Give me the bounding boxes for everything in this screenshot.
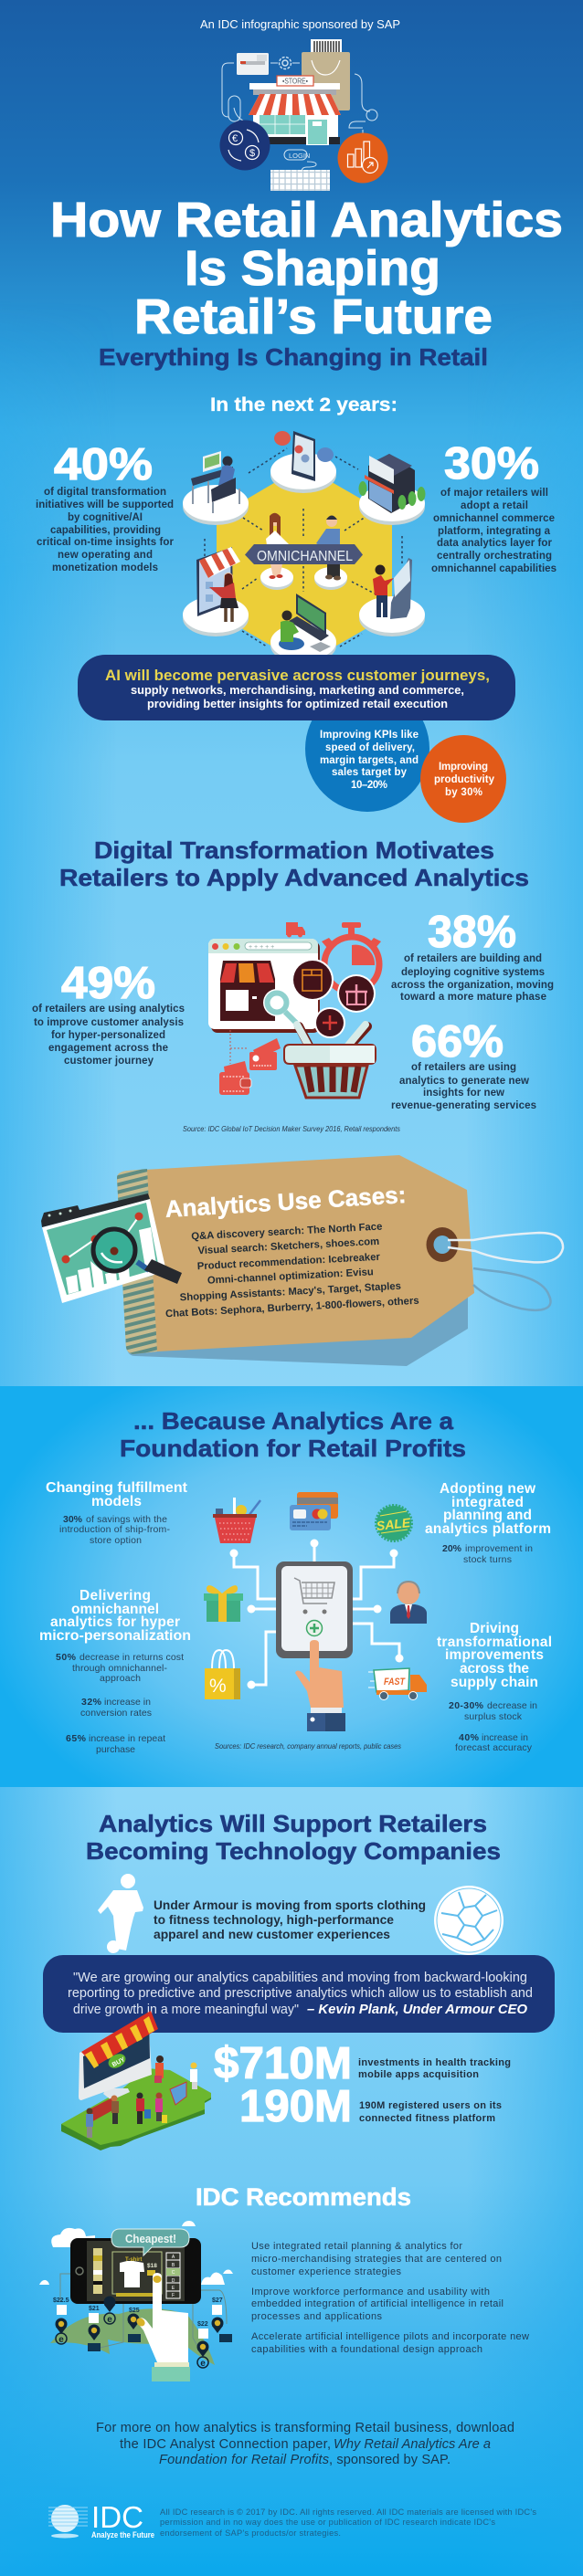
location pins and prices: $27 [212, 2297, 223, 2304]
stat: 49 percent: for hyper-personalized [51, 1030, 165, 1041]
icon: connector lines [222, 63, 377, 172]
stat: 40 percent: monetization models [52, 563, 158, 573]
stat: 40 percent: critical on-time insights for [37, 537, 175, 548]
icon: payment cards [290, 1492, 338, 1530]
phone [70, 2238, 201, 2304]
stat: 40 percent: 40% [54, 440, 153, 489]
icon: credit card [237, 53, 269, 75]
block: integrated platform: improvement in [465, 1543, 533, 1554]
icon: storefront: •STORE• [282, 77, 308, 86]
callout: CEO quote [43, 1955, 555, 2033]
heading: IDC Recommends: IDC Recommends [196, 2183, 411, 2211]
icon: sale badge: SALE [376, 1515, 412, 1533]
hero illustration: store [219, 39, 387, 191]
omnichannel banner [245, 544, 363, 564]
stat: 49 percent: to improve customer analysis [34, 1017, 184, 1028]
phone: F [172, 2293, 175, 2298]
tag eyelet [426, 1227, 459, 1262]
section heading: because analytics: ... Because Analytics Are a [133, 1407, 454, 1435]
tablet [276, 1561, 353, 1658]
block: changing fulfillment: models [91, 1494, 142, 1509]
block: omnichannel analytics: Delivering [80, 1588, 151, 1603]
stat: 30 percent: omnichannel commerce [433, 513, 555, 524]
circle: KPI improvement: 10–20% [351, 780, 387, 791]
stat: 38 percent: of retailers are building and [404, 953, 542, 964]
icon: discount bag: % [209, 1676, 227, 1697]
stat: 710M: $710M [214, 2039, 352, 2088]
stat: 49 percent [32, 959, 185, 1067]
icon: delivery truck [286, 922, 305, 937]
icon: soccer ball [434, 1886, 504, 1955]
stat: 710M: mobile apps acquisition [358, 2069, 479, 2080]
callout: AI pervasive: supply networks, merchandising, marketing and commerce, [131, 683, 464, 697]
subheading: next 2 years: In the next 2 years: [210, 394, 398, 415]
tag list: Visual search: Sketchers, shoes.com [197, 1236, 379, 1256]
stat: 40 percent: by cognitive/AI [68, 512, 143, 523]
block: integrated platform: planning and [443, 1508, 532, 1523]
recommendations list: embedded integration of artificial intelligence in retail [251, 2298, 504, 2309]
phone price-comparison illustration [39, 2221, 233, 2381]
man figure [316, 515, 341, 581]
call to action: Foundation for Retail Profits [159, 2453, 329, 2467]
phone: T-shirt [125, 2257, 142, 2263]
location pins and prices: e [58, 2335, 64, 2345]
stat: 66 percent [391, 1017, 536, 1111]
stat: 190M: 190M [239, 2082, 352, 2131]
icon: basket [213, 1498, 260, 1543]
recommendations list: capabilities with a foundational design approach [251, 2344, 482, 2355]
block: omnichannel analytics: 65% [66, 1733, 87, 1744]
monitor: BUY [111, 2056, 126, 2068]
icon: browser window with store: + + + + + [249, 944, 274, 951]
block: omnichannel analytics: decrease in returns cost [80, 1652, 184, 1663]
block: supply chain: forecast accuracy [455, 1742, 533, 1753]
text: Under Armour: to fitness technology, high-performance [154, 1913, 394, 1927]
stat: 710M: investments in health tracking [358, 2057, 511, 2068]
icon: currency exchange circle [219, 121, 270, 170]
icon: stopwatch [322, 922, 381, 992]
circle: productivity: by 30% [445, 787, 482, 798]
phone: B [172, 2263, 175, 2268]
connector dots [230, 1540, 404, 1689]
block: omnichannel analytics: micro-personalization [39, 1628, 191, 1644]
phone: D [172, 2278, 175, 2284]
block: omnichannel analytics: 50% [56, 1652, 77, 1663]
stat: 30 percent: of major retailers will [440, 488, 548, 499]
icon: storefront [249, 76, 341, 145]
stat: 40 percent: initiatives will be supported [36, 499, 174, 510]
subtitle: Everything Is Changing in Retail [99, 343, 488, 371]
dashed links [205, 448, 402, 647]
IDC logo: Analyze the Future [91, 2530, 154, 2540]
block: omnichannel analytics: analytics for hyper [50, 1614, 180, 1630]
tag list: Chat Bots: Sephora, Burberry, 1-800-flowers, others [165, 1296, 419, 1320]
thin wires [60, 2274, 227, 2356]
phone: E [172, 2286, 175, 2291]
location pins and prices: $22 [197, 2321, 208, 2328]
section heading: because analytics: Foundation for Retail Profits [120, 1435, 466, 1462]
legal text: endorsement of SAP's products/or strategies. [160, 2529, 341, 2538]
block: supply chain [437, 1621, 552, 1753]
block: omnichannel analytics: 32% [81, 1697, 102, 1708]
icon: currency exchange circle: $ [249, 148, 255, 159]
stat: 38 percent [391, 908, 554, 1003]
stat: 38 percent: across the organization, moving [391, 980, 554, 991]
call to action: , sponsored by SAP. [329, 2453, 450, 2467]
map [50, 2308, 215, 2365]
block: supply chain: Driving [470, 1621, 519, 1636]
woman figure [266, 513, 290, 579]
login pill label: LOGIN [289, 152, 310, 160]
cheapest speech bubble: Cheapest! [125, 2232, 176, 2245]
circle: KPI improvement: margin targets, and [320, 755, 419, 766]
stat: 30 percent: adopt a retail [461, 500, 528, 511]
platform [61, 2093, 211, 2150]
callout: CEO quote: – Kevin Plank, Under Armour CEO [307, 2003, 527, 2017]
IDC logo: IDC [91, 2500, 143, 2534]
icon: growth chart circle [338, 133, 387, 183]
callout: AI pervasive [78, 655, 515, 720]
icon: shopping basket [284, 1025, 376, 1098]
section heading: technology companies: Becoming Technology Companies [86, 1837, 501, 1865]
tag body [117, 1155, 474, 1354]
recommendations list: Accelerate artificial intelligence pilots and incorporate new [251, 2331, 529, 2342]
icon: person at desk [191, 451, 239, 513]
callout: CEO quote: drive growth in a more meaningful way" [73, 2003, 299, 2017]
section heading: because analytics [120, 1407, 466, 1462]
location pins and prices: $22.5 [53, 2297, 69, 2304]
tag list: Q&A discovery search: The North Face [191, 1222, 383, 1242]
block: omnichannel analytics: increase in repeat [89, 1733, 165, 1744]
block: changing fulfillment: 30% [63, 1514, 83, 1525]
stat: 710M [214, 2039, 511, 2088]
callout: CEO quote: reporting to predictive and prescriptive analytics which allow us to establish and [68, 1986, 533, 2001]
circle: KPI improvement: sales target by [332, 767, 408, 778]
section heading: digital transformation [59, 836, 529, 891]
block: omnichannel analytics: omnichannel [71, 1602, 159, 1617]
clouds [39, 2221, 233, 2285]
block: supply chain: supply chain [450, 1675, 538, 1690]
block: supply chain: transformational [437, 1635, 552, 1650]
icon: sale badge [376, 1506, 412, 1540]
icon: fast truck [368, 1668, 427, 1700]
icon: keyboard [270, 170, 330, 191]
recommendations list: processes and applications [251, 2311, 382, 2322]
stat: 30 percent [431, 439, 556, 574]
section heading: technology companies: Analytics Will Support Retailers [99, 1810, 487, 1837]
legal text [160, 2508, 536, 2538]
circle: KPI improvement: Improving KPIs like [320, 730, 419, 741]
callout: AI pervasive: providing better insights for optimized retail execution [147, 697, 448, 710]
cheapest speech bubble [111, 2229, 189, 2255]
text: Under Armour [154, 1898, 426, 1941]
stat: 30 percent: 30% [444, 439, 539, 489]
icon: shopping bag with barcode [302, 39, 350, 110]
block: changing fulfillment: introduction of ship-from- [59, 1524, 170, 1535]
stat: 190M [239, 2082, 502, 2131]
icon: product bubbles [292, 959, 376, 1038]
callout: CEO quote: "We are growing our analytics capabilities and moving from backward-looking [73, 1971, 527, 1985]
icon: soccer player [98, 1874, 143, 1953]
title [50, 193, 563, 344]
section heading: digital transformation: Retailers to Apply Advanced Analytics [59, 864, 529, 891]
block: integrated platform: Adopting new [440, 1481, 536, 1497]
block: integrated platform: integrated [451, 1495, 524, 1510]
recommendations list: Use integrated retail planning & analytics for [251, 2241, 462, 2252]
block: changing fulfillment [46, 1480, 187, 1546]
section heading: digital transformation: Digital Transformation Motivates [94, 836, 494, 864]
block: integrated platform [425, 1481, 551, 1565]
block: changing fulfillment: store option [90, 1535, 142, 1546]
block: supply chain: 20-30% [449, 1700, 484, 1711]
omnichannel hexagon diagram [183, 431, 426, 665]
block: changing fulfillment: Changing fulfillment [46, 1480, 187, 1496]
title: Retail’s Future [134, 289, 493, 344]
stat: 49 percent: 49% [61, 959, 155, 1008]
stat: 40 percent: of digital transformation [44, 487, 166, 498]
source note: Source: IDC Global IoT Decision Maker Survey 2016, Retail respondents [183, 1124, 401, 1133]
logo sphere [48, 2505, 88, 2539]
icon: discount bag [205, 1650, 240, 1699]
text: Under Armour: Under Armour is moving from sports clothing [154, 1898, 426, 1912]
location pins and prices: e [107, 2315, 112, 2325]
stat: 38 percent: deploying cognitive systems [401, 967, 545, 978]
title: Is Shaping [185, 241, 440, 296]
stat: 66 percent: revenue-generating services [391, 1100, 536, 1111]
block: omnichannel analytics: increase in [104, 1697, 151, 1708]
call to action: Why Retail Analytics Are a [334, 2437, 491, 2452]
stat: 40 percent [36, 440, 175, 573]
icon: cards and wallet [219, 1030, 281, 1095]
icon: browser window with store [208, 939, 320, 1033]
stat: 49 percent: of retailers are using analytics [32, 1004, 185, 1015]
call to action: For more on how analytics is transforming Retail business, download [96, 2421, 514, 2435]
block: supply chain: increase in [482, 1732, 528, 1743]
block: omnichannel analytics: conversion rates [80, 1708, 152, 1719]
shoppers [86, 2056, 197, 2138]
monitor [79, 2011, 158, 2100]
tag heading: Analytics Use Cases: [164, 1181, 407, 1223]
location pins and prices: e [200, 2359, 206, 2369]
recommendations list: micro-merchandising strategies that are centered on [251, 2254, 502, 2265]
section heading: technology companies [86, 1810, 501, 1865]
block: integrated platform: analytics platform [425, 1521, 551, 1537]
block: integrated platform: 20% [442, 1543, 462, 1554]
call to action: the IDC Analyst Connection paper, [120, 2437, 331, 2452]
location pins and prices: $25 [129, 2308, 140, 2314]
phone: C [172, 2270, 175, 2276]
chart card with magnifier [41, 1193, 182, 1303]
circle: KPI improvement [305, 686, 429, 812]
platforms [183, 453, 425, 664]
tag shadow [127, 1278, 468, 1366]
icon: isometric store [358, 454, 426, 513]
connector lines [234, 1543, 399, 1685]
block: omnichannel analytics: purchase [96, 1744, 135, 1755]
hand pointing [295, 1640, 345, 1731]
circle: productivity [420, 735, 506, 823]
legal text: All IDC research is © 2017 by IDC. All rights reserved. All IDC materials are licensed with IDC's [160, 2508, 536, 2517]
stat: 66 percent: of retailers are using [411, 1062, 516, 1073]
circle: productivity: Improving [439, 762, 488, 773]
icon: fast truck: FAST [384, 1677, 406, 1688]
icon: agent [390, 1582, 427, 1624]
block: supply chain: decrease in [487, 1700, 537, 1711]
source note: Sources: IDC research, company annual reports, public cases [215, 1741, 402, 1751]
phone: $18 [147, 2263, 157, 2269]
recommendations list [251, 2241, 529, 2355]
call to action [96, 2421, 514, 2467]
block: omnichannel analytics [39, 1588, 191, 1755]
hexagon [217, 466, 392, 665]
recommendations list: Improve workforce performance and usability with [251, 2287, 490, 2297]
block: supply chain: 40% [459, 1732, 480, 1743]
tag stripe [117, 1169, 157, 1354]
stat: 190M: 190M registered users on its [359, 2100, 502, 2111]
location pins and prices: $21 [89, 2306, 100, 2312]
icon: customer at kiosk [373, 558, 412, 619]
block: supply chain: improvements [445, 1647, 544, 1663]
icon: person gaming at screen [279, 594, 331, 652]
block: supply chain: across the [460, 1661, 529, 1677]
online store isometric illustration [61, 2011, 211, 2150]
stat: 40 percent: capabilities, providing [50, 525, 161, 536]
stat: 38 percent: 38% [428, 908, 516, 957]
omnichannel banner: OMNICHANNEL [257, 549, 353, 564]
icon: gear [280, 57, 291, 69]
stat: 38 percent: toward a more mature phase [400, 992, 546, 1003]
title: How Retail Analytics [50, 193, 563, 247]
stat: 30 percent: platform, integrating a [438, 526, 551, 537]
legal text: permission and in no way does the use or publication of IDC research indicate IDC's [160, 2518, 495, 2527]
tablet hub diagram [204, 1492, 427, 1731]
stat: 66 percent: insights for new [423, 1088, 504, 1099]
block: supply chain: surplus stock [464, 1711, 523, 1722]
stat: 66 percent: 66% [411, 1017, 504, 1067]
stat: 40 percent: new operating and [58, 550, 153, 561]
tag list: Product recommendation: Icebreaker [197, 1252, 381, 1272]
price tag: analytics use cases [41, 1155, 563, 1366]
callout: AI pervasive: AI will become pervasive across customer journeys, [105, 667, 490, 684]
stat: 30 percent: centrally orchestrating [437, 551, 552, 562]
stat: 30 percent: omnichannel capabilities [431, 563, 556, 574]
circle: KPI improvement: speed of delivery, [325, 742, 415, 753]
icon: smartphone with chat bubbles [274, 431, 334, 481]
tag list: Shopping Assistants: Macy's, Target, Staples [179, 1281, 401, 1303]
IDC logo [48, 2500, 154, 2540]
pointing hand [135, 2273, 190, 2381]
block: integrated platform: stock turns [463, 1554, 512, 1565]
stat: 66 percent: analytics to generate new [399, 1076, 529, 1087]
icon: gift [204, 1585, 243, 1622]
text: Under Armour: apparel and new customer experiences [154, 1928, 390, 1941]
block: omnichannel analytics: approach [100, 1673, 141, 1684]
phone: A [172, 2255, 175, 2260]
sponsor line: An IDC infographic sponsored by SAP [200, 18, 400, 31]
icon: currency exchange circle: € [232, 133, 238, 144]
stat: 30 percent: data analytics layer for [437, 538, 553, 549]
stat: 49 percent: customer journey [64, 1056, 154, 1067]
tag string [448, 1233, 563, 1310]
block: omnichannel analytics: through omnichannel- [72, 1663, 168, 1674]
block: changing fulfillment: of savings with the [86, 1514, 167, 1525]
ecommerce illustration [208, 922, 381, 1098]
tag list [165, 1222, 419, 1320]
icon: phone shop with shopper [196, 547, 240, 622]
stat: 49 percent: engagement across the [48, 1043, 168, 1054]
recommendations list: customer experience strategies [251, 2266, 402, 2277]
tag list: Omni-channel optimization: Evisu [207, 1267, 374, 1287]
circle: productivity: productivity [434, 774, 495, 785]
location pins and prices [53, 2296, 232, 2369]
stat: 190M: connected fitness platform [359, 2113, 495, 2124]
